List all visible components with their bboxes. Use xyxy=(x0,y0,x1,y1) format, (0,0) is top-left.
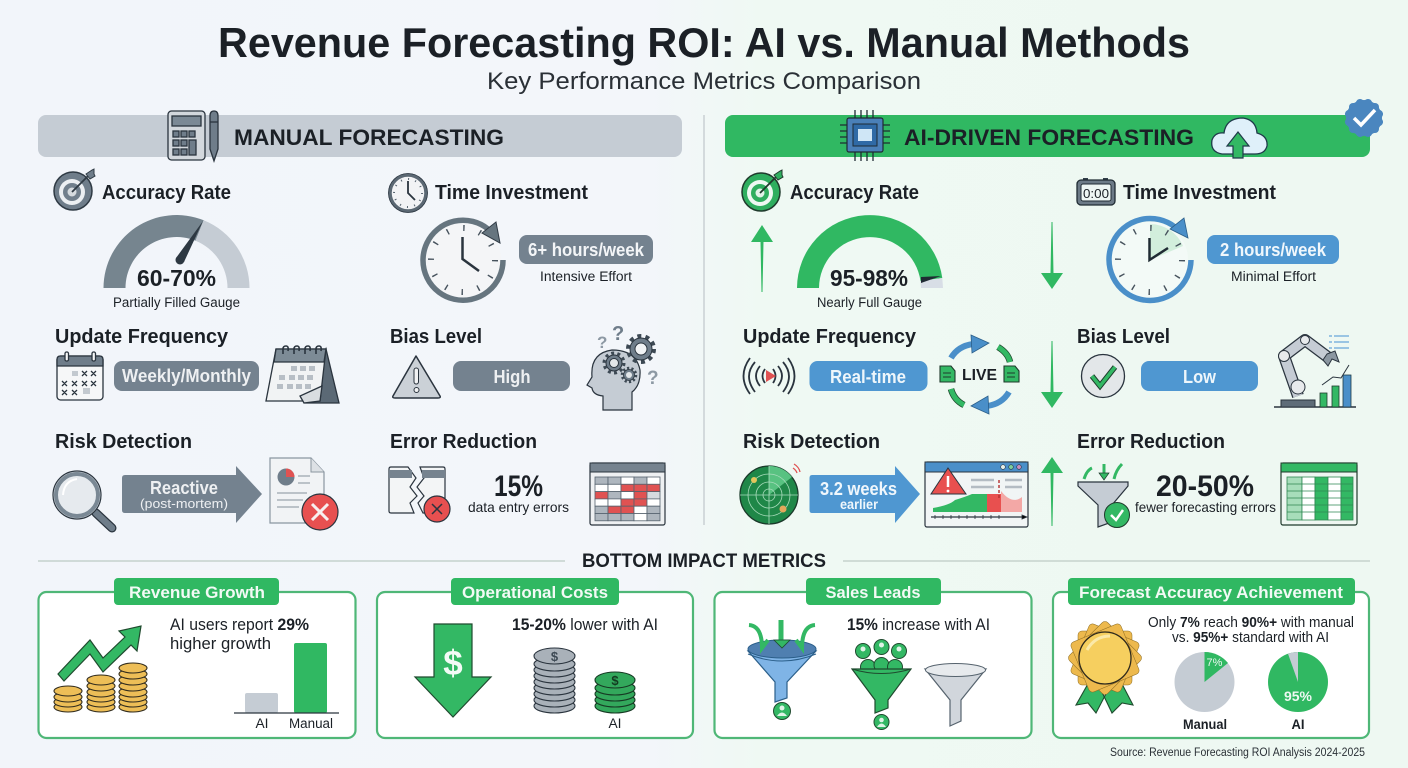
icon: calculator and pen xyxy=(168,111,218,161)
metric: time investment manual xyxy=(388,174,653,300)
pie chart: manual 7%: Manual xyxy=(1183,716,1227,732)
bar chart: growth: AI xyxy=(256,716,268,731)
icon: digital clock xyxy=(1077,178,1115,205)
metric: accuracy rate manual: Partially Filled Gauge xyxy=(113,295,240,310)
tab: operational costs xyxy=(451,578,619,605)
icon: warning triangle xyxy=(393,356,440,398)
icon: clock with arrow xyxy=(423,220,503,300)
pill: low xyxy=(1141,361,1258,391)
pie chart: manual 7%: 7% xyxy=(1207,657,1223,669)
ai header bar xyxy=(725,115,1370,157)
pill: 2 hours/week: 2 hours/week xyxy=(1220,240,1327,260)
metric: error reduction ai: fewer forecasting errors xyxy=(1135,499,1276,515)
metric: accuracy rate manual xyxy=(54,169,250,310)
section heading: bottom impact metrics: BOTTOM IMPACT METRICS xyxy=(582,551,826,572)
panel: ai-driven forecasting xyxy=(725,98,1384,528)
metric: error reduction manual: 15% xyxy=(494,470,543,503)
icon: blue clock xyxy=(1109,218,1191,300)
metric: update frequency ai: Update Frequency xyxy=(743,326,917,348)
metric: risk detection manual xyxy=(53,431,338,530)
metric: risk detection manual: Risk Detection xyxy=(55,431,192,453)
card: sales leads xyxy=(714,578,1032,738)
icon: live cycle: LIVE xyxy=(962,367,997,384)
pie chart: manual 7% xyxy=(1174,652,1234,732)
icon: green coin stack: $ xyxy=(611,673,619,688)
icon: head with gears: ? xyxy=(612,323,624,345)
card: revenue growth: higher growth xyxy=(170,635,271,653)
icon: green target xyxy=(742,170,783,211)
icon: verified badge xyxy=(1344,98,1384,138)
arrow: reactive: Reactive xyxy=(150,478,218,498)
metric: error reduction manual: data entry errors xyxy=(468,499,569,515)
pie chart: ai 95%: 95% xyxy=(1284,688,1313,704)
icon: gray coin stack: $ xyxy=(551,649,559,664)
icon: radar xyxy=(740,464,800,524)
metric: error reduction ai xyxy=(1077,431,1357,528)
metric: risk detection ai xyxy=(740,431,1063,527)
tab: sales leads: Sales Leads xyxy=(826,583,920,602)
icon: green coin stack xyxy=(595,672,635,713)
icon: chip xyxy=(840,110,890,161)
card: forecast accuracy achievement xyxy=(1053,578,1369,738)
icon: red error table xyxy=(590,463,665,525)
metric: accuracy rate manual: 60-70% xyxy=(137,265,216,291)
panel: manual forecasting xyxy=(38,111,682,530)
card: operational costs xyxy=(377,578,693,738)
metric: bias level ai: Bias Level xyxy=(1077,326,1170,348)
source note: Source: Revenue Forecasting ROI Analysis 2024-2025 xyxy=(1110,747,1365,759)
icon: small calendar xyxy=(57,352,103,400)
metric: update frequency manual: Update Frequency xyxy=(55,326,229,348)
icon: desk calendar xyxy=(266,346,339,403)
metric: time investment ai: Time Investment xyxy=(1123,182,1276,204)
icon: gray coin stack xyxy=(534,648,575,713)
metric: accuracy rate ai: Nearly Full Gauge xyxy=(817,295,922,310)
icon: filter funnel xyxy=(1078,464,1130,528)
metric: update frequency ai xyxy=(743,326,1063,414)
icon: live signal xyxy=(744,358,794,394)
pie chart: ai 95%: AI xyxy=(1292,716,1304,732)
icon: target xyxy=(54,169,95,210)
pill: 6+ hours/week xyxy=(519,235,653,264)
pill: weekly/monthly: Weekly/Monthly xyxy=(122,366,251,386)
icon: green spreadsheet xyxy=(1281,463,1357,525)
metric: risk detection ai: Risk Detection xyxy=(743,431,880,453)
icon: alert dashboard xyxy=(925,462,1028,527)
tab: revenue growth: Revenue Growth xyxy=(129,583,265,602)
metric: bias level ai xyxy=(1077,326,1356,407)
icon: down arrow with dollar xyxy=(415,624,491,717)
icon: broken window xyxy=(389,467,450,522)
icon: down arrow with dollar: $ xyxy=(443,644,463,683)
pill: real-time xyxy=(810,361,928,391)
tab: forecast accuracy achievement xyxy=(1068,578,1355,605)
gauge: partially filled xyxy=(104,215,250,288)
icon: magnifier xyxy=(53,471,112,528)
pill: 6+ hours/week: 6+ hours/week xyxy=(528,240,645,260)
label: ai costs: AI xyxy=(608,716,622,731)
icon: robot arm with chart xyxy=(1274,336,1356,407)
metric: accuracy rate ai: 95-98% xyxy=(830,265,908,291)
pie chart: ai 95% xyxy=(1268,652,1328,732)
icon: head with gears: ? xyxy=(647,368,659,389)
icon: cloud upload xyxy=(1212,118,1267,158)
metric: error reduction ai: Error Reduction xyxy=(1077,431,1225,453)
text: costs callout: 15-20% lower with AI xyxy=(512,616,658,634)
metric: time investment manual: Intensive Effort xyxy=(540,269,632,284)
pill: high: High xyxy=(494,367,530,387)
arrow: reactive: (post-mortem) xyxy=(140,496,228,511)
metric: error reduction manual: Error Reduction xyxy=(390,431,537,453)
text: accuracy callout: Only 7% reach 90%+ with manual xyxy=(1148,614,1354,631)
metric: time investment manual: Time Investment xyxy=(435,182,588,204)
metric: update frequency manual xyxy=(55,326,339,403)
icon: head with gears xyxy=(587,323,659,410)
ai header text: AI-DRIVEN FORECASTING xyxy=(904,125,1194,150)
pill: low: Low xyxy=(1183,367,1217,387)
metric: bias level manual xyxy=(390,323,659,410)
arrow: reactive xyxy=(122,466,262,523)
arrow: down bias xyxy=(1041,341,1063,408)
card: forecast accuracy achievement: vs. 95%+ standard with AI xyxy=(1172,629,1329,646)
arrow: 3.2 weeks earlier: earlier xyxy=(840,496,878,512)
pill: real-time: Real-time xyxy=(830,367,906,387)
arrow: down xyxy=(1041,222,1063,289)
manual header text: MANUAL FORECASTING xyxy=(234,125,504,150)
icon: small clock xyxy=(388,174,428,212)
icon: green funnel with leads xyxy=(852,640,911,730)
metric: error reduction ai: 20-50% xyxy=(1156,470,1254,503)
icon: report with x xyxy=(270,458,338,530)
icon: gray funnel xyxy=(925,664,986,726)
gauge: nearly full xyxy=(797,215,943,288)
metric: bias level manual: Bias Level xyxy=(390,326,482,348)
icon: blue funnel xyxy=(748,620,816,720)
tab: sales leads xyxy=(806,578,941,605)
text: leads callout: 15% increase with AI xyxy=(847,616,990,634)
pill: 2 hours/week xyxy=(1207,235,1339,264)
metric: error reduction manual xyxy=(389,431,665,525)
metric: accuracy rate manual: Accuracy Rate xyxy=(102,182,231,204)
icon: live cycle xyxy=(940,335,1019,414)
metric: accuracy rate ai: Accuracy Rate xyxy=(790,182,919,204)
metric: time investment ai: Minimal Effort xyxy=(1231,269,1316,284)
metric: time investment ai xyxy=(1041,178,1339,300)
manual header bar xyxy=(38,115,682,157)
icon: growth arrow xyxy=(58,626,141,681)
subtitle: Key Performance Metrics Comparison xyxy=(487,68,921,95)
arrow: 3.2 weeks earlier: 3.2 weeks xyxy=(820,479,897,499)
tab: operational costs: Operational Costs xyxy=(462,583,608,602)
icon: head with gears: ? xyxy=(597,333,607,352)
pill: weekly/monthly xyxy=(114,361,259,391)
arrow: up xyxy=(751,225,773,292)
icon: digital clock: 0:00 xyxy=(1083,186,1109,201)
card: revenue growth xyxy=(38,578,356,738)
bar chart: growth xyxy=(234,643,339,731)
arrow: 3.2 weeks earlier xyxy=(810,466,920,523)
icon: check circle xyxy=(1082,354,1124,398)
icon: coin stacks xyxy=(54,663,147,712)
icon: medal xyxy=(1067,620,1143,713)
pill: high xyxy=(453,361,570,391)
text: growth callout: AI users report 29% xyxy=(170,616,309,634)
metric: accuracy rate ai xyxy=(742,170,943,310)
tab: forecast accuracy achievement: Forecast Accuracy Achievement xyxy=(1079,583,1343,602)
tab: revenue growth xyxy=(114,578,279,605)
arrow: up error xyxy=(1041,457,1063,526)
bar chart: growth: Manual xyxy=(289,716,333,731)
title: Revenue Forecasting ROI: AI vs. Manual Methods xyxy=(218,19,1190,66)
